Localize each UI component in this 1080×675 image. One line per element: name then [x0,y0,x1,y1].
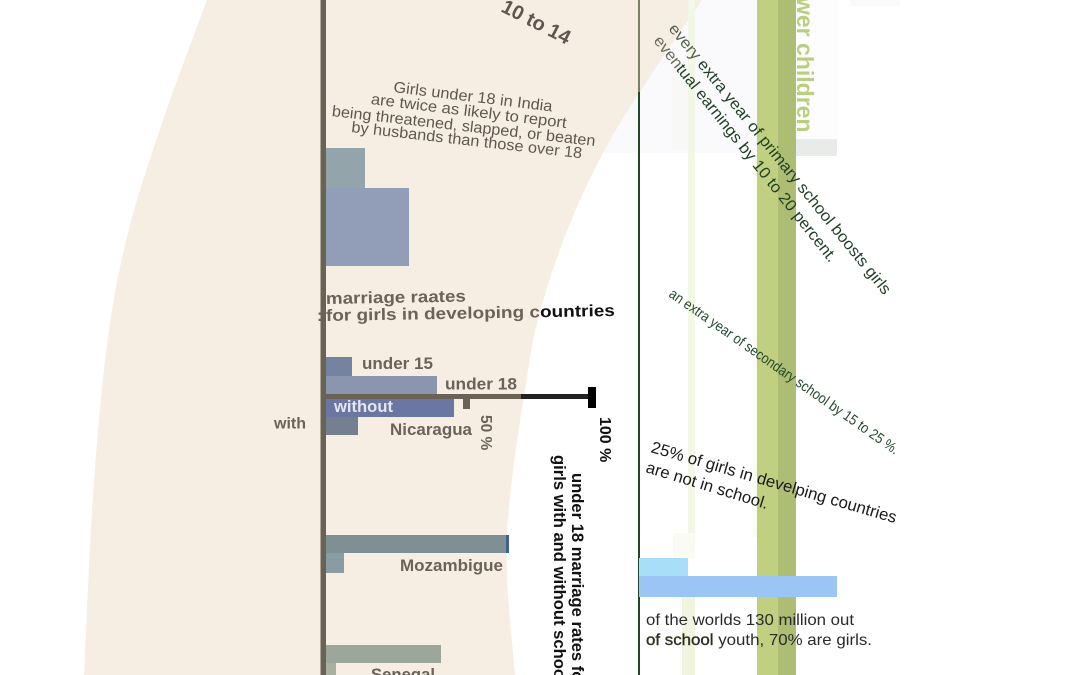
grey legend block [796,139,837,156]
text block: out of school youth [646,612,872,649]
bar chart: India [326,148,409,266]
chart heading: marriage rates: marriage raates [326,288,466,308]
scale label: 100 %: 100 % [596,417,613,462]
country label: Nicaragua: Nicaragua [390,421,473,439]
text block: 25% of girls not in school: 25% of girls in develping countries [649,439,899,527]
legend label: without: without [333,398,393,416]
bar chart: Senegal [326,645,441,675]
legend label: with: with [273,416,306,432]
rotated chart caption [550,455,587,675]
text block: out of school youth: of school youth, 70% are girls. [646,632,872,649]
diagonal text: secondary school earnings: an extra year of secondary school by 15 to 25 %. [666,286,902,458]
faint panel behind education column [602,0,900,153]
bar chart: Mozambique [326,535,509,573]
text block: 25% of girls not in school: are not in school. [644,459,771,513]
diagonal text: primary school earnings: every extra year of primary school boosts girls [665,21,894,298]
diagonal text: primary school earnings: eventual earnings by 10 to 20 percent. [650,33,840,266]
text block: India: by husbands than those over 18 [351,119,583,162]
green vertical bar [757,0,796,675]
rotated heading: fewer children: wer children [792,0,818,132]
chart heading: marriage rates: : [317,307,322,325]
main vertical axis [320,0,326,675]
bar chart: out of school youth [639,558,837,597]
text block: India: being threatened, slapped, or beaten [331,103,596,150]
text block: out of school youth: of the worlds 130 million out [646,612,855,629]
beige curved band [84,0,702,675]
legend label: under 15: under 15 [362,355,433,373]
pale green stripe [672,0,757,675]
bar chart: Nicaragua [326,357,454,435]
legend label: under 18: under 18 [445,376,517,394]
text block: India: Girls under 18 in India [393,79,554,116]
education axis line [638,0,640,675]
text block: India [331,79,596,162]
text block: India: are twice as likely to report [370,91,568,132]
percentage scale axis [321,387,596,409]
country label: Mozambique: Mozambigue [400,557,503,575]
scale label: 50 %: 50 % [477,415,494,451]
chart heading: marriage rates [317,288,615,325]
chart heading: marriage rates: for girls in developing c ountries [326,302,615,325]
